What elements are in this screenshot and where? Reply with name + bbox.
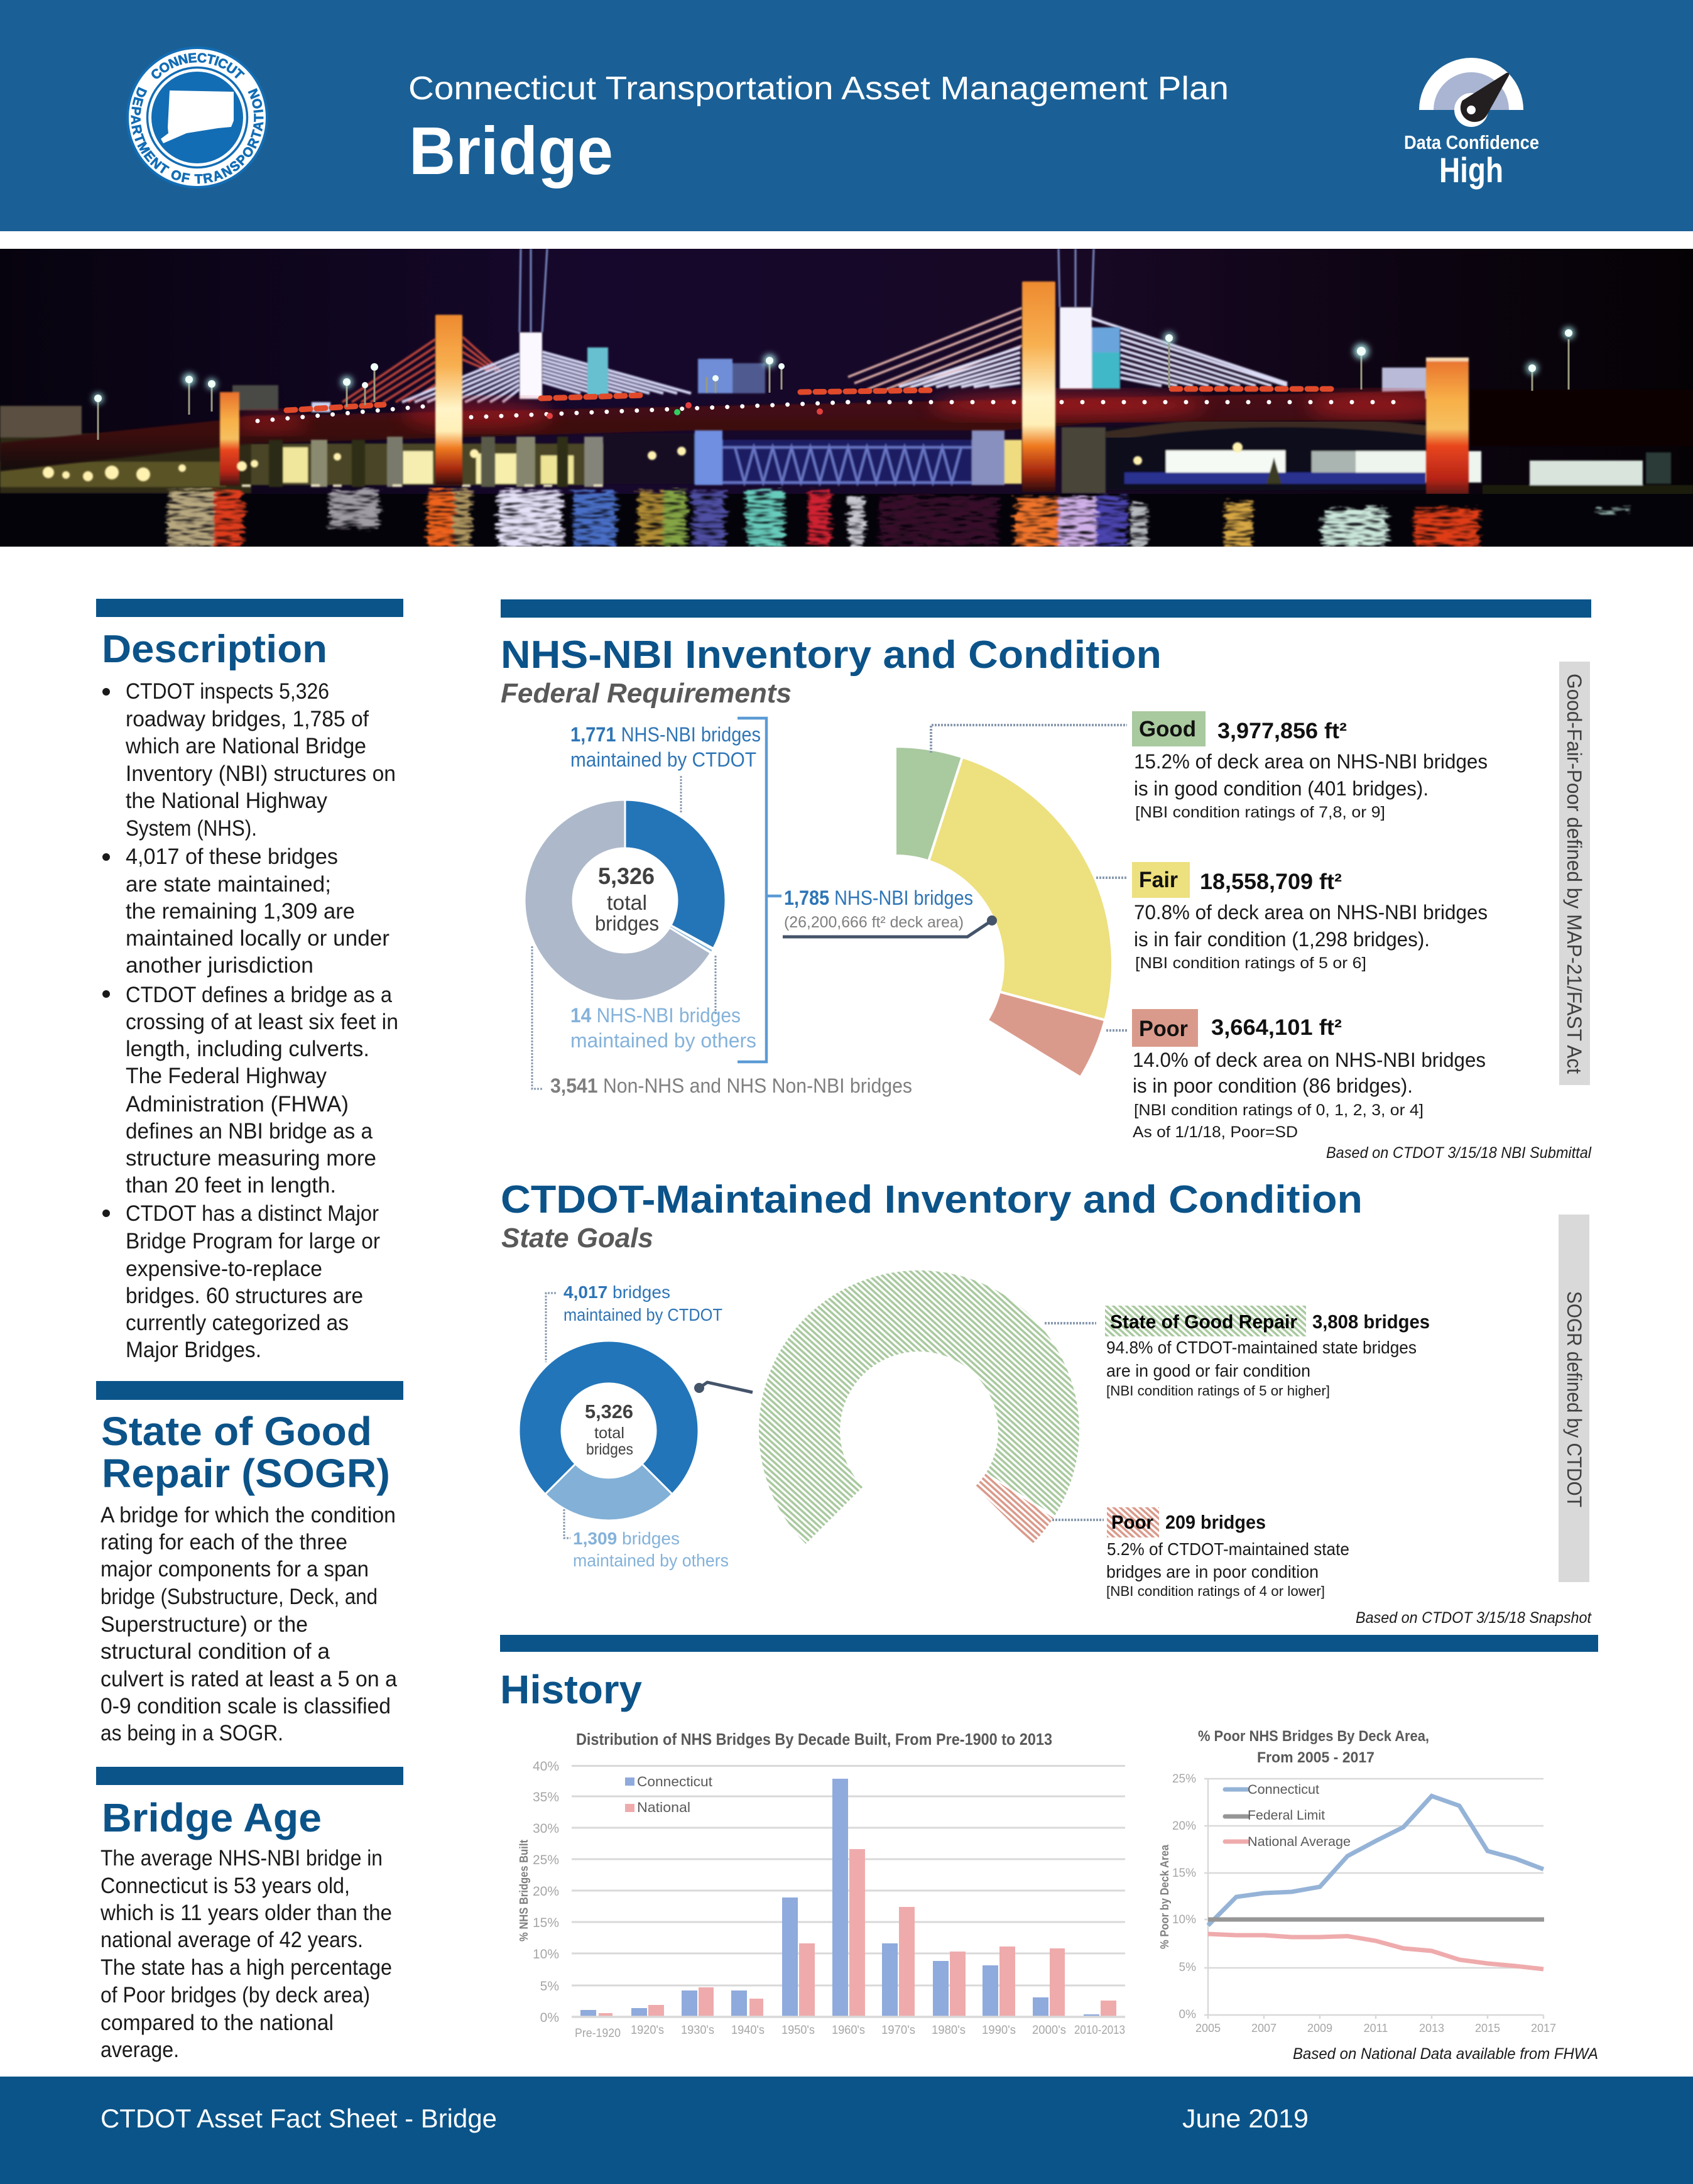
label: 1,785 bridges — [784, 887, 973, 931]
x axis labels: 1930's — [681, 2024, 714, 2037]
lit pylons — [520, 307, 1120, 399]
callout: fair: [NBI condition ratings of 5 or 6] — [1135, 954, 1366, 972]
panel: description — [96, 599, 403, 1362]
panel: NHS-NBI inventory and condition — [501, 599, 1592, 1162]
dotted leaders: donut — [532, 776, 716, 1089]
SOGR definition text: as being in a SOGR. — [101, 1721, 283, 1745]
callout: state of good repair: are in good or fair condition — [1106, 1361, 1310, 1380]
arc chart: deck area condition — [895, 746, 1113, 1078]
callout: state of good repair — [1105, 1306, 1430, 1399]
subheading: federal requirements: Federal Requirements — [501, 678, 792, 709]
y axis labels: 0% — [540, 2011, 559, 2025]
side label: federal definition: Good-Fair-Poor defined by MAP-21/FAST Act — [1563, 674, 1586, 1074]
bullet list: than 20 feet in length. — [126, 1173, 336, 1198]
y axis labels: 25% — [533, 1853, 559, 1867]
y axis labels: 40% — [533, 1759, 559, 1774]
callout: poor: 3,664,101 ft² — [1211, 1015, 1342, 1040]
bullet list: System (NHS). — [126, 816, 257, 841]
heading: bridge age: Bridge Age — [102, 1795, 322, 1840]
callout: poor: [NBI condition ratings of 0, 1, 2, 3, or 4] — [1134, 1101, 1424, 1119]
y axis labels: 15% — [533, 1916, 559, 1930]
x axis labels: 2009 — [1307, 2022, 1332, 2034]
donut center label: total — [594, 1424, 624, 1442]
icon: data confidence gauge — [1419, 58, 1523, 127]
bullet list: the remaining 1,309 are — [126, 899, 355, 924]
x axis labels: 2007 — [1251, 2022, 1277, 2034]
label: 4,017 bridges — [563, 1282, 722, 1324]
heading: description: Description — [102, 628, 327, 671]
SOGR definition text: A bridge for which the condition — [101, 1503, 396, 1527]
bullet list: are state maintained; — [126, 872, 331, 897]
bracket — [738, 718, 781, 1062]
x axis labels: 2017 — [1531, 2022, 1556, 2034]
x axis labels: 2010-2013 — [1074, 2024, 1125, 2037]
y axis labels: 20% — [1172, 1820, 1196, 1833]
SOGR definition text: bridge (Substructure, Deck, and — [101, 1585, 378, 1609]
icon: CTDOT seal: CONNECTICUT — [151, 53, 245, 79]
callout: poor: 209 bridges — [1165, 1511, 1266, 1533]
dotted leaders: donut — [546, 1293, 570, 1538]
y axis labels — [1172, 1772, 1196, 2021]
bridge age text: Connecticut is 53 years old, — [101, 1874, 350, 1898]
data confidence value: High — [1439, 150, 1503, 190]
subheading: state goals: State Goals — [501, 1223, 653, 1253]
bullet list: crossing of at least six feet in — [126, 1010, 398, 1034]
source note: Based on CTDOT 3/15/18 NBI Submittal — [1326, 1144, 1592, 1162]
label: 1,771 bridges: 1,771 NHS-NBI bridges — [570, 723, 761, 746]
donut center label: bridges — [595, 912, 659, 935]
x axis labels: 2000's — [1032, 2024, 1066, 2037]
illuminated towers — [220, 281, 1469, 500]
label: 1,771 bridges: maintained by CTDOT — [570, 748, 756, 771]
bridge age text: of Poor bridges (by deck area) — [101, 1983, 370, 2007]
donut center label — [595, 863, 659, 935]
bullet list — [102, 679, 398, 1362]
x axis labels: 2013 — [1419, 2022, 1444, 2034]
National bars — [599, 1849, 1116, 2017]
chart title — [1198, 1728, 1429, 1766]
heading: state of good repair: State of Good — [101, 1409, 372, 1454]
donut center label: bridges — [586, 1441, 633, 1458]
callout: good: 3,977,856 ft² — [1217, 719, 1347, 743]
legend: National Average — [1248, 1835, 1351, 1849]
x axis labels: 2005 — [1195, 2022, 1221, 2034]
panel: bridge age — [96, 1767, 403, 2062]
series: federal limit — [1208, 1918, 1544, 1921]
icon: CTDOT seal — [126, 46, 268, 188]
y axis labels: 10% — [1172, 1913, 1196, 1926]
label: 1,309 bridges — [573, 1529, 729, 1570]
legend: Connecticut — [1248, 1783, 1319, 1797]
callout: poor — [1106, 1507, 1349, 1599]
bullet list: which are National Bridge — [125, 734, 366, 758]
bridge piers — [242, 427, 1106, 493]
header subject: Bridge — [409, 112, 613, 188]
bullet list: Bridge Program for large or — [126, 1229, 380, 1253]
bullet list: expensive-to-replace — [126, 1257, 322, 1281]
footer title: CTDOT Asset Fact Sheet - Bridge — [101, 2104, 497, 2133]
x axis labels: 2011 — [1364, 2022, 1388, 2034]
water reflections — [168, 490, 1630, 547]
bullet list: Inventory (NBI) structures on — [126, 762, 396, 786]
y axis labels — [533, 1759, 559, 2025]
chart title: Distribution of NHS Bridges By Decade Built, From Pre-1900 to 2013 — [576, 1730, 1052, 1749]
photo: Pearl Harbor Memorial Bridge at night — [0, 249, 1693, 547]
bullet list: the National Highway — [126, 789, 327, 813]
callout: fair: 18,558,709 ft² — [1200, 870, 1342, 894]
callout: good: [NBI condition ratings of 7,8, or 9] — [1135, 804, 1385, 821]
y axis labels: 5% — [540, 1979, 559, 1994]
bullet list: maintained locally or under — [126, 926, 389, 951]
callout: poor: As of 1/1/18, Poor=SD — [1133, 1123, 1298, 1141]
series: Connecticut — [1208, 1796, 1543, 1925]
callout: state of good repair: [NBI condition ratings of 5 or higher] — [1106, 1383, 1330, 1399]
panel: state of good repair — [96, 1381, 403, 1745]
donut center label: 5,326 — [585, 1400, 633, 1422]
source note: Based on CTDOT 3/15/18 Snapshot — [1356, 1609, 1592, 1627]
street lamps — [43, 327, 1574, 481]
callout: good: Good — [1139, 717, 1196, 741]
SOGR definition text: major components for a span — [101, 1557, 369, 1581]
bullet list: another jurisdiction — [126, 953, 313, 978]
donut center label — [585, 1400, 633, 1458]
callout: poor: Poor — [1111, 1511, 1153, 1533]
bridge age text: which is 11 years older than the — [100, 1901, 392, 1925]
y axis labels: 25% — [1172, 1772, 1196, 1786]
y axis title: % Poor by Deck Area — [1158, 1844, 1171, 1949]
donut chart: 5,326 total bridges — [525, 800, 726, 1001]
bullet list: defines an NBI bridge as a — [126, 1119, 373, 1144]
callout: poor: Poor — [1139, 1017, 1188, 1041]
bridge age text: national average of 42 years. — [101, 1928, 363, 1952]
label: 1,309 bridges: 1,309 bridges — [573, 1529, 680, 1548]
callout: fair — [1132, 862, 1488, 972]
label: 1,785 bridges: 1,785 NHS-NBI bridges — [784, 887, 973, 909]
heading: CTDOT-maintained: CTDOT-Maintained Inventory and Condition — [501, 1178, 1363, 1221]
callout: state of good repair: State of Good Repair — [1110, 1311, 1297, 1333]
side label: state definition: SOGR defined by CTDOT — [1563, 1291, 1586, 1507]
label: 1,785 bridges: (26,200,666 ft² deck area) — [784, 914, 964, 931]
callout: fair: 70.8% of deck area on NHS-NBI bridges — [1134, 901, 1488, 924]
heading: state of good repair — [101, 1409, 390, 1496]
y axis labels: 0% — [1179, 2008, 1196, 2021]
y axis labels: 5% — [1179, 1961, 1196, 1974]
label: 14 bridges: maintained by others — [570, 1029, 756, 1052]
bullet list: currently categorized as — [126, 1311, 349, 1335]
donut chart: maintenance split — [519, 1341, 699, 1521]
x axis labels: 1920's — [631, 2024, 664, 2037]
footer band — [0, 2077, 1693, 2184]
callout: good: is in good condition (401 bridges). — [1134, 777, 1429, 800]
legend — [625, 1774, 712, 1815]
x axis labels: 1960's — [832, 2024, 865, 2037]
deck lights — [258, 389, 1410, 421]
x axis labels: 1940's — [731, 2024, 765, 2037]
callout: poor: 5.2% of CTDOT-maintained state — [1107, 1539, 1349, 1559]
callout: poor — [1132, 1009, 1486, 1141]
ring chart: SOGR share — [759, 1270, 1079, 1544]
SOGR definition text: 0-9 condition scale is classified — [101, 1694, 391, 1718]
bridge age text — [100, 1846, 392, 2062]
bullet list: roadway bridges, 1,785 of — [126, 707, 369, 731]
callout: state of good repair: 94.8% of CTDOT-maintained state bridges — [1106, 1338, 1417, 1357]
donut center label: 5,326 — [598, 863, 655, 889]
bridge age text: compared to the national — [101, 2011, 334, 2035]
header band — [0, 0, 1693, 231]
arrow: connector to condition arc — [783, 915, 997, 937]
header title: Connecticut Transportation Asset Management Plan — [408, 70, 1229, 107]
legend — [1225, 1783, 1351, 1849]
bridge stay cables — [342, 249, 1287, 402]
legend: National — [637, 1799, 690, 1815]
bullet list: Administration (FHWA) — [126, 1092, 349, 1117]
footer date: June 2019 — [1182, 2104, 1309, 2133]
water — [0, 494, 1693, 547]
chart title: From 2005 - 2017 — [1257, 1749, 1375, 1766]
bullet list: structure measuring more — [126, 1146, 376, 1171]
chart title: % Poor NHS Bridges By Deck Area, — [1198, 1728, 1429, 1745]
bullet list: Major Bridges. — [126, 1338, 261, 1362]
label: 14 bridges: 14 NHS-NBI bridges — [570, 1004, 741, 1027]
bridge age text: average. — [101, 2038, 179, 2062]
x axis labels: Pre-1920 — [575, 2027, 621, 2040]
y axis labels: 35% — [533, 1790, 559, 1805]
x axis labels: 2015 — [1475, 2022, 1500, 2034]
label: 14 bridges — [570, 1004, 756, 1052]
y axis title: % NHS Bridges Built — [518, 1840, 530, 1941]
side label: state definition — [1559, 1215, 1589, 1582]
x axis labels — [1195, 2022, 1556, 2034]
label: 1,771 bridges — [570, 723, 761, 771]
callout: poor: [NBI condition ratings of 4 or lower] — [1106, 1583, 1325, 1599]
bridge age text: The state has a high percentage — [101, 1955, 392, 1980]
x axis labels: 1980's — [932, 2024, 966, 2037]
bullet list: The Federal Highway — [126, 1064, 327, 1088]
y axis labels: 15% — [1172, 1867, 1196, 1880]
series: national average — [1208, 1934, 1543, 1969]
SOGR definition text: rating for each of the three — [101, 1530, 347, 1554]
arrow: connector to ring — [694, 1382, 753, 1393]
bullet list: CTDOT inspects 5,326 — [126, 679, 329, 704]
callout: state of good repair: 3,808 bridges — [1312, 1311, 1430, 1333]
x axis labels: 1970's — [881, 2024, 915, 2037]
SOGR definition text: Superstructure) or the — [101, 1612, 308, 1637]
label: 1,309 bridges: maintained by others — [573, 1551, 729, 1570]
label: 3,541 bridges: 3,541 Non-NHS and NHS Non-NBI bridges — [550, 1074, 912, 1097]
y axis labels: 10% — [533, 1947, 559, 1962]
callout: fair: is in fair condition (1,298 bridges). — [1134, 928, 1430, 951]
bullet list: 4,017 of these bridges — [126, 844, 338, 869]
y axis labels: 20% — [533, 1884, 559, 1899]
callout: poor: bridges are in poor condition — [1106, 1562, 1319, 1581]
label: 4,017 bridges: maintained by CTDOT — [563, 1305, 722, 1324]
heading: NHS-NBI inventory: NHS-NBI Inventory and Condition — [501, 633, 1162, 677]
heading: state of good repair: Repair (SOGR) — [102, 1451, 390, 1496]
legend: Federal Limit — [1248, 1808, 1325, 1823]
callout: poor: is in poor condition (86 bridges). — [1133, 1074, 1413, 1097]
icon: CTDOT seal: DEPARTMENT OF TRANSPORTATION — [131, 87, 264, 183]
SOGR definition text — [101, 1503, 398, 1745]
callout: good — [1132, 711, 1488, 821]
bullet list: length, including culverts. — [126, 1037, 369, 1061]
x axis labels: 1950's — [781, 2024, 815, 2037]
bridge deck — [0, 391, 1445, 471]
heading: history: History — [500, 1667, 642, 1712]
dotted leaders: condition — [931, 725, 1127, 1030]
y axis labels: 30% — [533, 1821, 559, 1836]
Connecticut bars — [580, 1779, 1099, 2017]
label: 4,017 bridges: 4,017 bridges — [563, 1282, 670, 1302]
x axis labels — [575, 2024, 1125, 2040]
dotted leaders: ring — [1045, 1323, 1104, 1520]
bullet list: CTDOT defines a bridge as a — [126, 983, 392, 1007]
donut center label: total — [607, 891, 647, 914]
bar chart: bridges by decade built — [518, 1730, 1125, 2040]
callout: fair: Fair — [1139, 868, 1178, 892]
panel: CTDOT-maintained inventory and condition — [501, 1178, 1592, 1627]
panel: history — [500, 1635, 1598, 2063]
source note: Based on National Data available from FHWA — [1293, 2045, 1598, 2063]
bullet list: CTDOT has a distinct Major — [126, 1201, 379, 1226]
SOGR definition text: culvert is rated at least a 5 on a — [101, 1667, 398, 1691]
bridge age text: The average NHS-NBI bridge in — [101, 1846, 383, 1870]
SOGR definition text: structural condition of a — [101, 1639, 330, 1664]
x axis labels: 1990's — [982, 2024, 1016, 2037]
legend: Connecticut — [637, 1774, 712, 1789]
callout: good: 15.2% of deck area on NHS-NBI bridges — [1134, 750, 1488, 773]
callout: poor: 14.0% of deck area on NHS-NBI bridges — [1133, 1049, 1486, 1071]
bullet list: bridges. 60 structures are — [126, 1284, 363, 1308]
data confidence label: Data Confidence — [1404, 131, 1539, 153]
line chart: percent poor by deck area — [1158, 1728, 1556, 2034]
